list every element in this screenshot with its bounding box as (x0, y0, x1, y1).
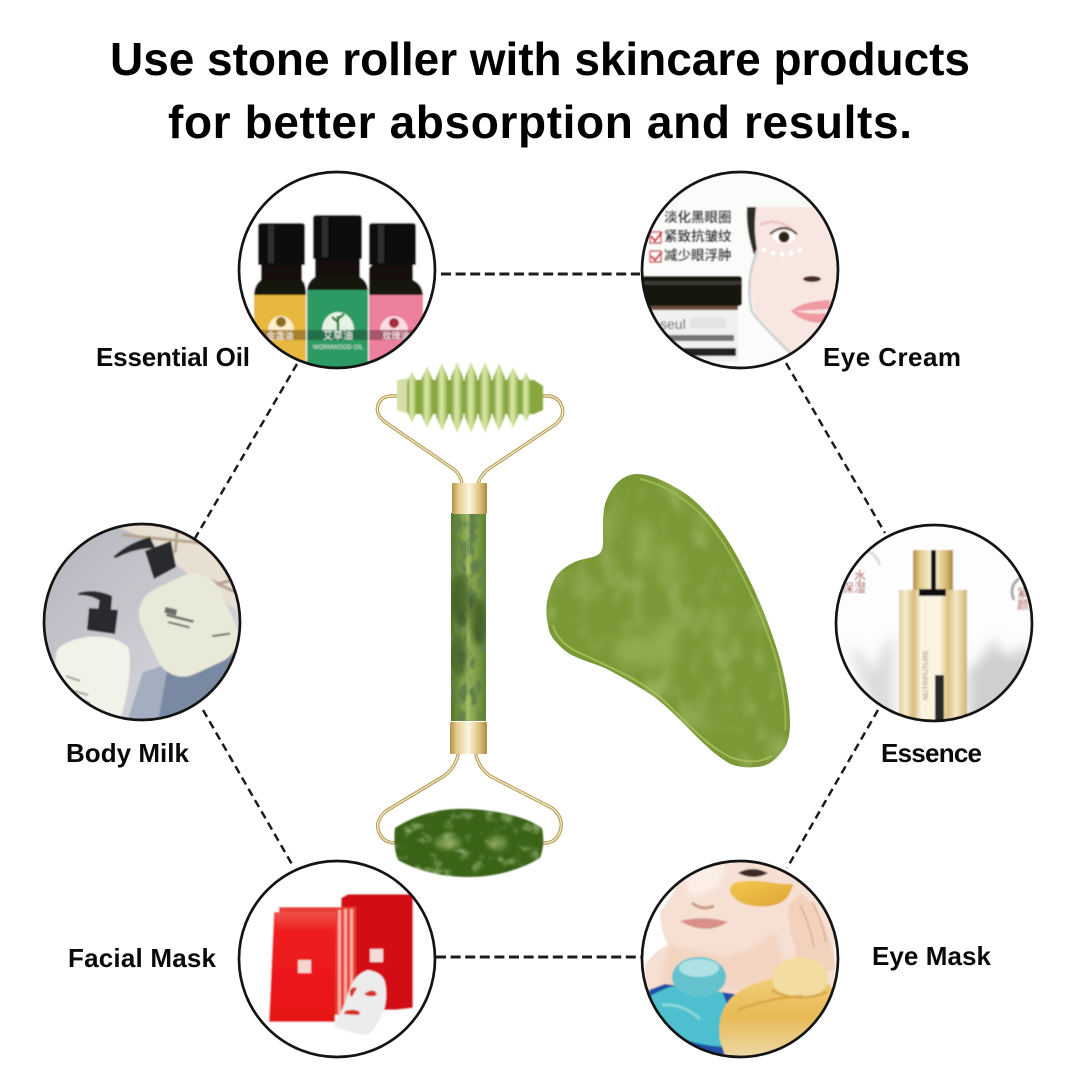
bottom wire frame (378, 755, 561, 843)
top wire frame (377, 396, 563, 484)
icon: jade double roller (377, 362, 563, 877)
panel: facial mask (239, 861, 435, 1057)
connector: essential oil to body milk (194, 364, 297, 540)
ad text (842, 569, 1029, 612)
icon: green oil bottle: WORMWOOD OIL (313, 345, 364, 351)
icon: cream jar (640, 276, 742, 362)
icon: gold gel patches (719, 957, 834, 1059)
label: facial mask: Facial Mask (68, 943, 217, 973)
jade handle (451, 513, 486, 721)
icon: white sheet mask (335, 970, 386, 1035)
icon: cream jar: seul (660, 316, 686, 332)
label: essential oil: Essential Oil (96, 342, 250, 372)
ribbed jade roller head (397, 362, 543, 433)
icon: red mask box (341, 894, 413, 1010)
icon: yellow oil bottle: 金盏油 (266, 330, 294, 341)
panel: essence (836, 525, 1032, 725)
icon: green oil bottle (307, 215, 368, 376)
icon: pink oil bottle (369, 223, 423, 374)
icon: blue gel patch (649, 957, 736, 1062)
connector: essence to eye mask (787, 710, 878, 868)
title (110, 33, 970, 148)
connector: facial mask to eye mask (436, 956, 642, 958)
panel: body milk (44, 524, 247, 725)
icon: lower lotion bottle (55, 591, 130, 725)
claims list: 淡化黑眼圈 (664, 209, 732, 225)
claims list (650, 209, 732, 263)
label: eye cream: Eye Cream (823, 342, 961, 372)
title: for better absorption and results. (168, 96, 912, 148)
ad text: 水 (854, 569, 866, 583)
icon: gold serum bottle: NUTRIFUTURE (923, 650, 930, 700)
icon: upper lotion bottle (112, 536, 238, 678)
icon: jade gua sha board (546, 474, 790, 767)
icon: gold serum bottle (899, 550, 967, 725)
connector: eye cream to essence (786, 363, 885, 533)
title: Use stone roller with skincare products (110, 33, 970, 85)
smooth jade roller head (394, 809, 543, 877)
claims list: 减少眼浮肿 (664, 247, 732, 263)
ad text: 颜 (1017, 597, 1029, 612)
label: essence: Essence (881, 738, 982, 768)
top gold collar (452, 483, 487, 514)
connector: body milk to facial mask (203, 710, 293, 866)
connector: essential oil to eye cream (441, 272, 640, 276)
claims list: 紧致抗皱纹 (664, 228, 732, 244)
icon: yellow oil bottle (254, 223, 306, 374)
ad text: 保湿 (842, 580, 866, 595)
icon: red mask sachets (269, 907, 356, 1022)
label: body milk: Body Milk (66, 738, 190, 768)
panel: eye mask (642, 861, 838, 1062)
ad text: 紧 (1017, 586, 1029, 600)
milk splashes (850, 549, 1030, 725)
icon: woman's face with patch (645, 861, 836, 1000)
label: eye mask: Eye Mask (872, 941, 992, 971)
panel: essential oil (239, 172, 435, 376)
icon: pink oil bottle: 玫瑰油 (382, 330, 410, 341)
icon: woman's face (746, 206, 836, 354)
panel: eye cream (640, 172, 845, 372)
icon: green oil bottle: 艾草油 (323, 329, 353, 342)
bottom gold collar (450, 722, 487, 754)
